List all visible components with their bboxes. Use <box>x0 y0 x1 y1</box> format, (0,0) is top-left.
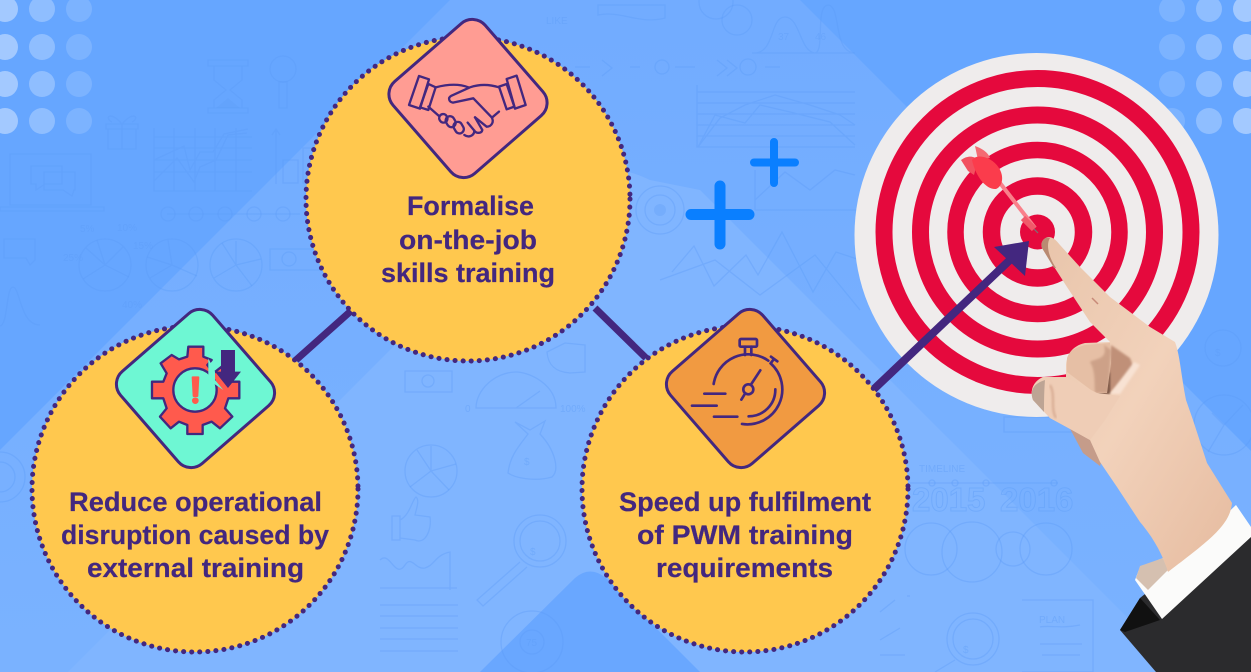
doodle: timeline years: 2016 <box>1000 481 1073 518</box>
doodle: small pie lower <box>405 445 457 497</box>
doodle: laptop <box>0 154 104 211</box>
doodle: gauge: 0 <box>465 404 471 415</box>
doodle: gauge <box>465 372 586 415</box>
doodle: lower line chart <box>755 170 860 210</box>
doodle: money bag: $ <box>524 457 530 468</box>
doodle: hourglass <box>208 60 248 113</box>
doodle: thumbs up and wave <box>380 497 458 651</box>
doodle: gauge: 100% <box>560 404 586 415</box>
doodle: area lines <box>697 85 855 147</box>
palm highlight <box>1110 362 1140 394</box>
connector: top to right <box>595 308 646 358</box>
doodle: bell curve and bubble <box>0 239 40 326</box>
doodle: money note middle <box>405 371 452 392</box>
icon: plus large <box>691 186 749 244</box>
fold shadow between fingers <box>1102 345 1134 394</box>
icon: dart <box>961 146 1038 233</box>
doodle: bell curves: 37 <box>778 32 790 43</box>
panel: left circle <box>32 326 358 652</box>
lower fingers <box>1068 420 1108 466</box>
arrow: to bullseye <box>873 241 1029 390</box>
doodle: plan sheet <box>1022 600 1093 672</box>
doodle: pie charts: 10% <box>117 223 137 234</box>
doodle: peak chart <box>660 232 860 310</box>
doodle: coins and banknote top <box>546 0 752 35</box>
heading: top circle: on-the-job <box>399 225 537 255</box>
heading: right circle: Speed up fulfilment <box>619 487 871 517</box>
doodle: timeline years: 2015 <box>912 481 985 518</box>
finger nail shading <box>1042 237 1056 268</box>
doodle: coin stack <box>547 343 585 373</box>
target board <box>854 53 1218 417</box>
doodle: money bag <box>508 421 556 479</box>
doodle: clock right <box>1194 395 1251 455</box>
doodle: coins and banknote top: LIKE <box>546 16 568 27</box>
doodle: pie charts <box>63 223 262 311</box>
finger knuckle line <box>1092 298 1098 304</box>
doodle: top arrows <box>575 59 780 76</box>
hand pointing <box>1032 237 1251 672</box>
hand and finger <box>1032 237 1232 572</box>
doodle: dollar magnifier <box>477 515 566 606</box>
doodle: curve and arrows lower middle <box>880 596 910 655</box>
doodle: plan sheet: PLAN <box>1039 615 1065 626</box>
curled finger <box>1067 343 1111 393</box>
doodle: dollar loupe: $ <box>963 645 969 656</box>
connector: left to top <box>296 310 352 360</box>
doodle: pie charts: 40% <box>122 300 142 311</box>
heading: top circle: skills training <box>381 258 555 288</box>
doodle: bell curves: 46 <box>815 32 827 43</box>
doodle: magnifier <box>270 56 296 108</box>
doodle: dollar coin right <box>1205 330 1241 366</box>
doodle: bars and arrow <box>272 129 320 184</box>
panel: right circle <box>582 326 908 652</box>
doodle: pie charts: 25% <box>63 253 83 264</box>
heading: top circle: Formalise <box>407 191 534 221</box>
doodle: timeline years <box>910 464 1073 518</box>
doodle: donut chart: 75 <box>526 638 538 649</box>
doodle: pie charts: 5% <box>80 224 95 235</box>
doodle: dollar magnifier: $ <box>530 547 536 558</box>
doodle: chain <box>161 207 300 221</box>
shirt cuff <box>1135 505 1251 619</box>
doodle: target left edge <box>0 452 25 502</box>
doodle: target small <box>636 186 684 234</box>
icon: plus small <box>754 142 795 183</box>
heading: right circle: requirements <box>656 553 833 583</box>
decor: dots top left <box>0 0 92 134</box>
decor: dots top right <box>1159 0 1251 134</box>
doodle: bell curves <box>752 5 855 53</box>
doodle: pie charts: 15% <box>133 241 153 252</box>
doodle: timeline years: TIMELINE <box>919 464 965 475</box>
heading: left circle: external training <box>87 553 304 583</box>
doodle: donut chart <box>501 611 563 672</box>
icon: stopwatch badge <box>659 302 832 475</box>
doodle: venn circles <box>905 522 1072 582</box>
doodle: gift <box>106 116 138 149</box>
heading: left circle: Reduce operational <box>69 487 322 517</box>
doodle: dollar coin right: $ <box>1215 348 1221 359</box>
heading: left circle: disruption caused by <box>61 520 329 550</box>
doodle: dollar loupe <box>935 613 999 672</box>
doodle: calendar hatch <box>1004 417 1072 432</box>
panel: top circle <box>306 37 630 361</box>
doodle: line chart grid <box>154 128 252 191</box>
thumb <box>1032 377 1120 440</box>
heading: right circle: of PWM training <box>637 520 853 550</box>
icon: handshake badge <box>382 12 554 185</box>
doodle: banknote <box>270 249 330 270</box>
icon: gear badge <box>109 302 282 475</box>
jacket sleeve <box>1120 530 1251 672</box>
